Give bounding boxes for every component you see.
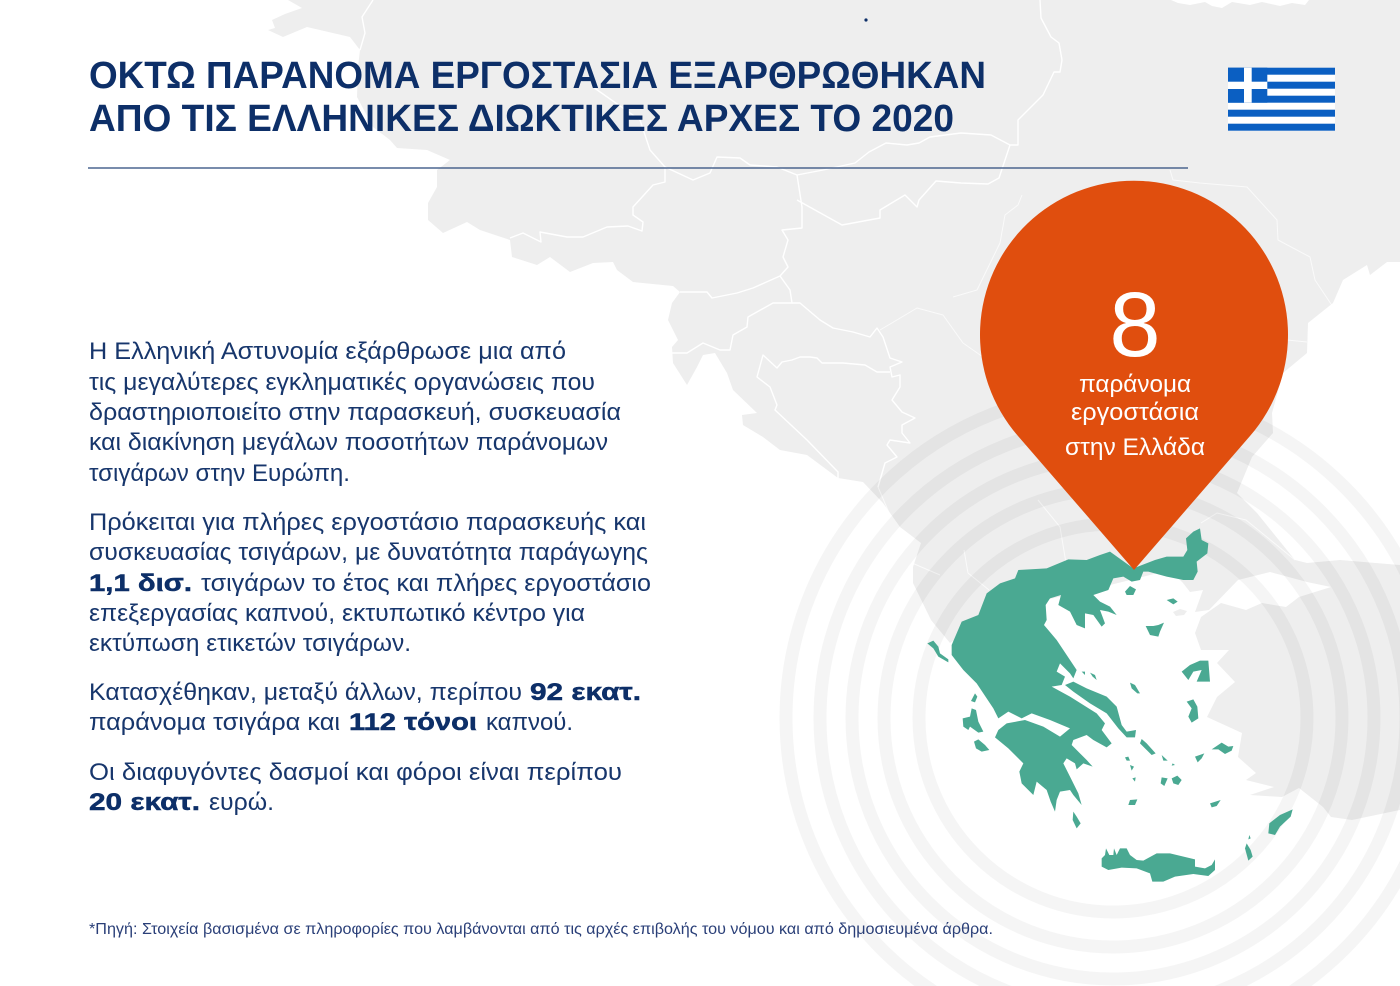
pin label: στην Ελλάδα bbox=[1065, 434, 1205, 461]
small dot bbox=[864, 18, 868, 22]
callout: location pin bbox=[980, 181, 1288, 570]
paragraph 2: συσκευασίας τσιγάρων, με δυνατότητα παράγωγης bbox=[89, 539, 648, 566]
paragraph 1: δραστηριοποιείτο στην παρασκευή, συσκευασία bbox=[89, 399, 621, 426]
icon: Greek flag bbox=[1228, 68, 1335, 131]
paragraph 1: και διακίνηση μεγάλων ποσοτήτων παράνομων bbox=[89, 429, 608, 456]
source footnote: *Πηγή: Στοιχεία βασισμένα σε πληροφορίες που λαμβάνονται από τις αρχές επιβολής του νόμου και από δημοσιευμένα άρθρα. bbox=[89, 921, 993, 938]
paragraph 2: τσιγάρων το έτος και πλήρες εργοστάσιο bbox=[201, 570, 651, 597]
paragraph 4: 20 εκατ. bbox=[89, 789, 200, 816]
divider rule bbox=[88, 167, 1188, 169]
paragraph 3: παράνομα τσιγάρα και bbox=[89, 709, 340, 736]
title: ΟΚΤΩ ΠΑΡΑΝΟΜΑ ΕΡΓΟΣΤΑΣΙΑ ΕΞΑΡΘΡΩΘΗΚΑΝ bbox=[89, 55, 986, 97]
paragraph 3: καπνού. bbox=[486, 709, 573, 736]
paragraph 1: τις μεγαλύτερες εγκληματικές οργανώσεις που bbox=[89, 369, 595, 396]
map of Greece bbox=[927, 528, 1293, 882]
title bbox=[89, 55, 986, 140]
paragraph 1: τσιγάρων στην Ευρώπη. bbox=[89, 460, 350, 487]
paragraph 4: Οι διαφυγόντες δασμοί και φόροι είναι περίπου bbox=[89, 759, 622, 786]
paragraph 3 bbox=[89, 679, 641, 736]
paragraph 3: 92 εκατ. bbox=[530, 679, 641, 706]
paragraph 1 bbox=[89, 338, 621, 487]
paragraph 3: Κατασχέθηκαν, μεταξύ άλλων, περίπου bbox=[89, 679, 522, 706]
pin number: 8 bbox=[1109, 274, 1161, 376]
paragraph 2: εκτύπωση ετικετών τσιγάρων. bbox=[89, 630, 411, 657]
title: ΑΠΟ ΤΙΣ ΕΛΛΗΝΙΚΕΣ ΔΙΩΚΤΙΚΕΣ ΑΡΧΕΣ ΤΟ 2020 bbox=[89, 98, 954, 140]
paragraph 2 bbox=[89, 509, 651, 657]
paragraph 1: Η Ελληνική Αστυνομία εξάρθρωσε μια από bbox=[89, 338, 566, 365]
pin label: παράνομα bbox=[1079, 371, 1191, 398]
paragraph 2: επεξεργασίας καπνού, εκτυπωτικό κέντρο για bbox=[89, 600, 585, 627]
pin label bbox=[1065, 371, 1205, 461]
paragraph 4: ευρώ. bbox=[209, 789, 274, 816]
paragraph 4 bbox=[89, 759, 622, 816]
pin label: εργοστάσια bbox=[1071, 399, 1199, 426]
paragraph 2: 1,1 δισ. bbox=[89, 570, 192, 597]
paragraph 3: 112 τόνοι bbox=[349, 709, 477, 736]
concentric rings around Greece bbox=[786, 391, 1400, 986]
paragraph 2: Πρόκειται για πλήρες εργοστάσιο παρασκευής και bbox=[89, 509, 646, 536]
